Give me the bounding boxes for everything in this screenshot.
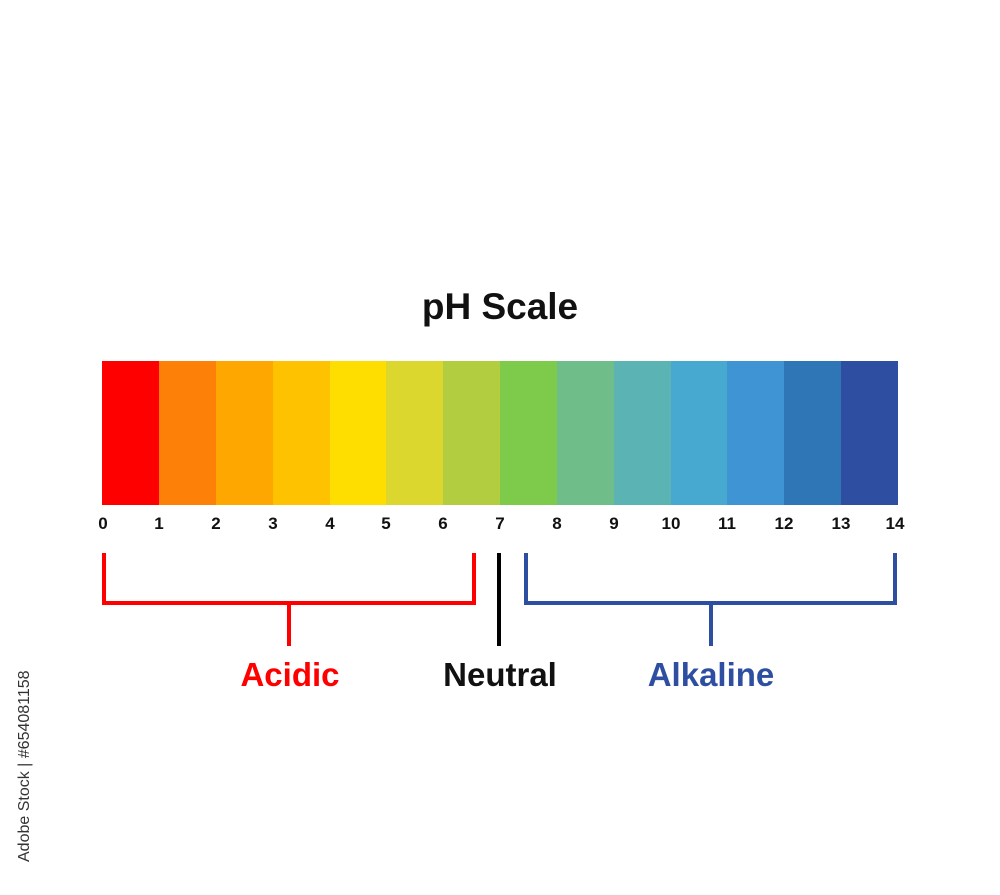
- bracket: alkaline: [526, 553, 895, 646]
- scale numbers: 1: [154, 514, 164, 533]
- scale numbers: 5: [381, 514, 391, 533]
- scale numbers: 8: [552, 514, 562, 533]
- watermark text: Adobe Stock | #654081158: [16, 670, 33, 862]
- neutral line: [497, 553, 501, 646]
- scale numbers: 11: [718, 514, 736, 533]
- scale numbers: 7: [495, 514, 505, 533]
- scale numbers: 12: [775, 514, 793, 533]
- label: neutral: Neutral: [443, 656, 557, 693]
- scale numbers: 4: [325, 514, 335, 533]
- title: pH Scale: [422, 286, 578, 327]
- scale numbers: 13: [832, 514, 850, 533]
- scale numbers: 0: [98, 514, 108, 533]
- label: acidic: Acidic: [240, 656, 340, 693]
- color scale bar: [102, 361, 898, 505]
- scale numbers: [98, 514, 905, 533]
- scale numbers: 3: [268, 514, 278, 533]
- scale numbers: 14: [886, 514, 905, 533]
- scale numbers: 6: [438, 514, 448, 533]
- bracket: acidic: [104, 553, 474, 646]
- label: alkaline: Alkaline: [648, 656, 774, 693]
- scale numbers: 10: [662, 514, 680, 533]
- scale numbers: 9: [609, 514, 619, 533]
- scale numbers: 2: [211, 514, 221, 533]
